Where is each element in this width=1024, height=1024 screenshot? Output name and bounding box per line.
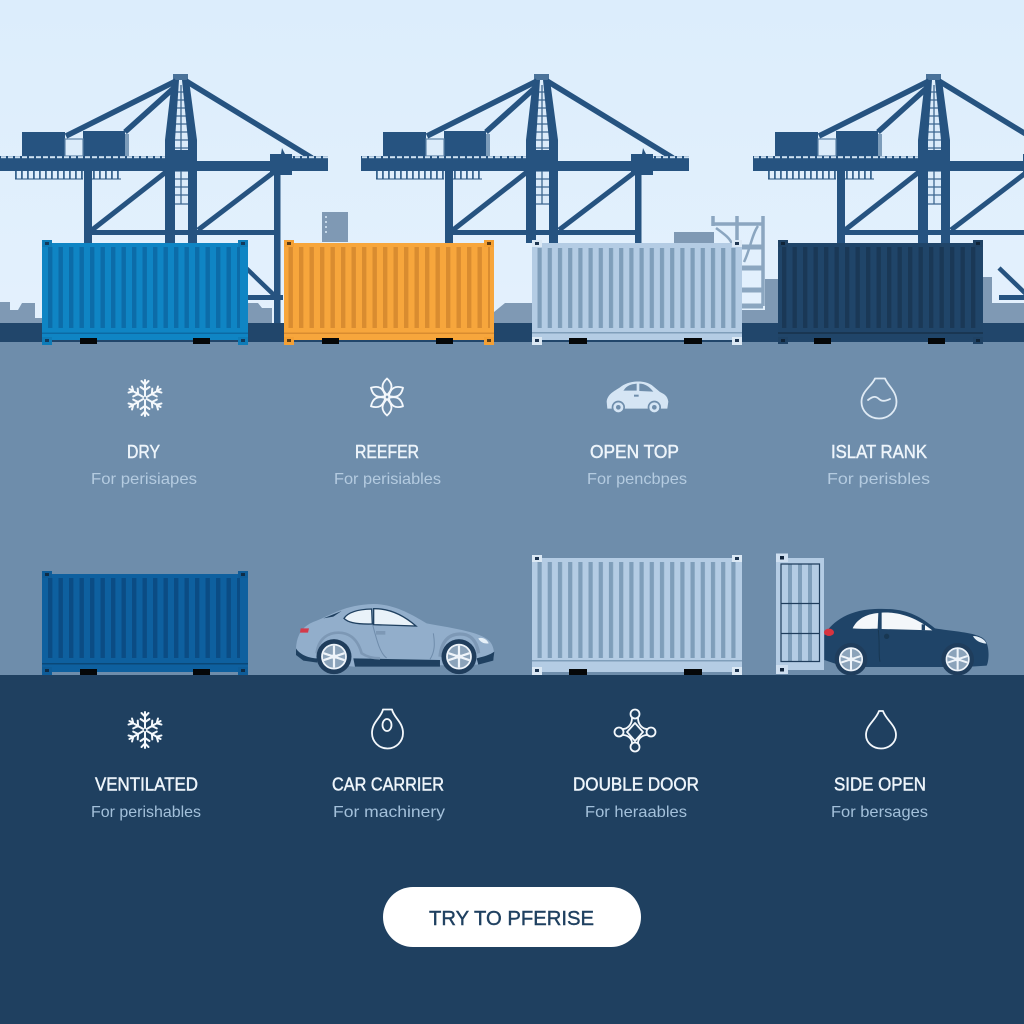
caption: car carrier: For machinery [333, 804, 445, 821]
container: navy tank [778, 240, 983, 344]
icon: knot [614, 710, 656, 752]
panel: harbour sky [0, 0, 1024, 343]
icon: car [607, 381, 668, 414]
caption: open top: For pencbpes [587, 471, 687, 488]
crane 3 [753, 74, 1024, 326]
heading: ventilated: VENTILATED [95, 774, 198, 794]
item: double door [573, 710, 699, 821]
heading: double door: DOUBLE DOOR [573, 774, 699, 794]
caption: double door: For heraables [585, 804, 687, 821]
car: navy hatchback [824, 609, 989, 676]
button: TRY TO PFERISE [429, 908, 594, 930]
icon: drop [866, 711, 896, 748]
icon: drop with inner ring [372, 710, 403, 748]
skyline silhouette [0, 277, 1024, 323]
crane 1 [0, 74, 328, 326]
container: double door light [532, 555, 742, 675]
item: open top [587, 381, 687, 488]
item: dry [91, 380, 197, 488]
item: side open [831, 711, 928, 821]
button [383, 887, 641, 947]
item: car carrier [332, 710, 445, 821]
item: reefer [334, 378, 441, 488]
panel: middle container row [0, 240, 1024, 676]
distant crane tower [674, 216, 763, 306]
container: ventilated deep blue [42, 571, 248, 675]
caption: dry: For perisiapes [91, 471, 197, 488]
heading: car carrier: CAR CARRIER [332, 774, 444, 794]
icon: drop with wave [862, 378, 896, 419]
panel: bottom container row [0, 675, 1024, 1024]
icon: snowflake [127, 712, 163, 748]
caption: islat rank: For perisbles [827, 471, 930, 488]
heading: open top: OPEN TOP [590, 442, 679, 462]
container: open top light [532, 240, 742, 345]
car: light blue coupe [296, 604, 494, 674]
icon: flower [369, 378, 405, 416]
crane 2 [361, 74, 689, 326]
heading: islat rank: ISLAT RANK [831, 442, 927, 462]
container: reefer orange [284, 240, 494, 345]
quay band [0, 323, 1024, 343]
icon: snowflake [127, 380, 163, 416]
heading: side open: SIDE OPEN [834, 774, 926, 794]
caption: ventilated: For perishables [91, 804, 201, 821]
container: dry blue [42, 240, 248, 345]
caption: side open: For bersages [831, 804, 928, 821]
container: side open door end [776, 554, 824, 674]
item: ventilated [91, 712, 201, 821]
heading: reefer: REEFER [355, 442, 419, 462]
heading: dry: DRY [127, 442, 160, 462]
item: islat rank [827, 378, 930, 488]
distant building behind reefer [322, 212, 348, 242]
caption: reefer: For perisiables [334, 471, 441, 488]
